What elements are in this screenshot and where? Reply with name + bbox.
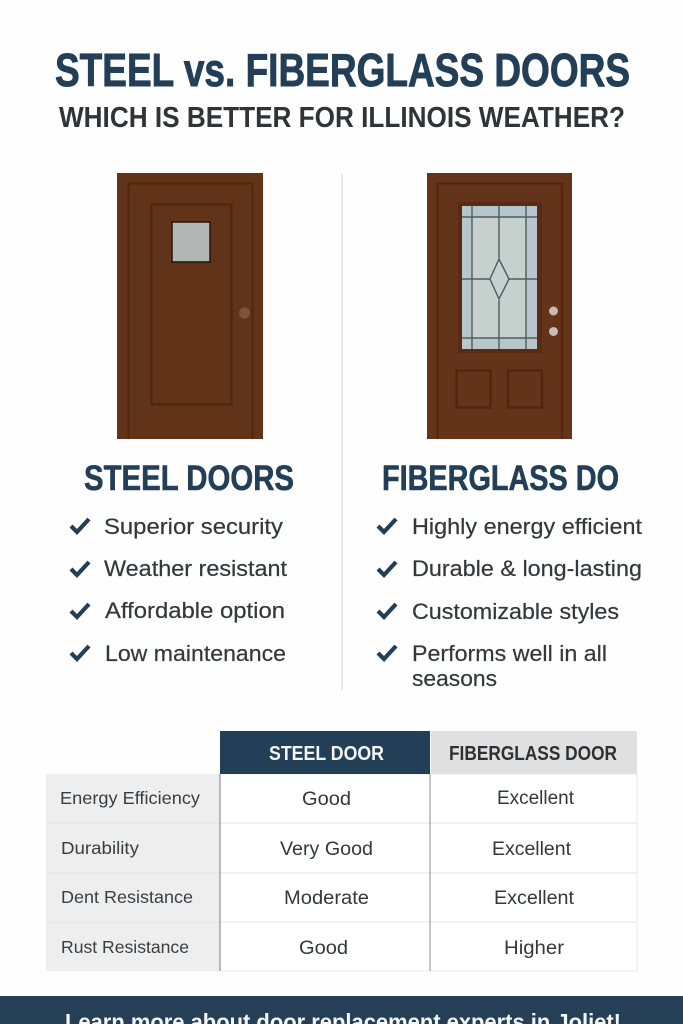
fiberglass door values (492, 788, 575, 959)
steel door values: Very Good (280, 839, 373, 860)
row labels (60, 788, 200, 957)
row labels: Rust Resistance (61, 937, 189, 957)
comparison table (46, 731, 637, 971)
fiberglass benefits list: seasons (412, 666, 497, 691)
steel door values: Good (299, 938, 348, 959)
icon: steel door (117, 173, 263, 439)
fiberglass benefits list: Durable & long-lasting (412, 556, 642, 581)
header: steel door: STEEL DOOR (269, 743, 384, 765)
steel door values (280, 789, 373, 959)
glass window (458, 202, 542, 353)
fiberglass benefits list: Performs well in all (412, 641, 607, 666)
steel door values: Moderate (284, 888, 369, 909)
fiberglass door values: Excellent (492, 839, 572, 860)
fiberglass benefits list: Highly energy efficient (412, 514, 642, 539)
header: steel door (220, 731, 430, 774)
heading: steel doors: STEEL DOORS (84, 459, 294, 498)
icon: fiberglass door (427, 173, 572, 439)
row labels: Energy Efficiency (60, 788, 200, 808)
steel door values: Good (302, 789, 351, 810)
steel benefits list: Affordable option (105, 598, 285, 623)
steel benefits list: Superior security (104, 514, 283, 539)
subtitle: WHICH IS BETTER FOR ILLINOIS WEATHER? (59, 102, 625, 134)
fiberglass benefits list (378, 514, 642, 691)
row labels: Durability (61, 838, 139, 858)
steel benefits list: Low maintenance (105, 641, 286, 666)
heading: fiberglass doors: FIBERGLASS DO (382, 459, 619, 498)
steel benefits list: Weather resistant (104, 556, 287, 581)
fiberglass benefits list: Customizable styles (412, 599, 619, 624)
header: fiberglass door: FIBERGLASS DOOR (449, 743, 617, 765)
fiberglass door values: Excellent (494, 888, 575, 909)
header: fiberglass door (431, 731, 637, 774)
footer banner (0, 996, 683, 1024)
row labels: Dent Resistance (61, 887, 193, 907)
fiberglass door values: Excellent (497, 788, 575, 809)
fiberglass door values: Higher (504, 938, 565, 959)
steel benefits list (71, 514, 287, 666)
